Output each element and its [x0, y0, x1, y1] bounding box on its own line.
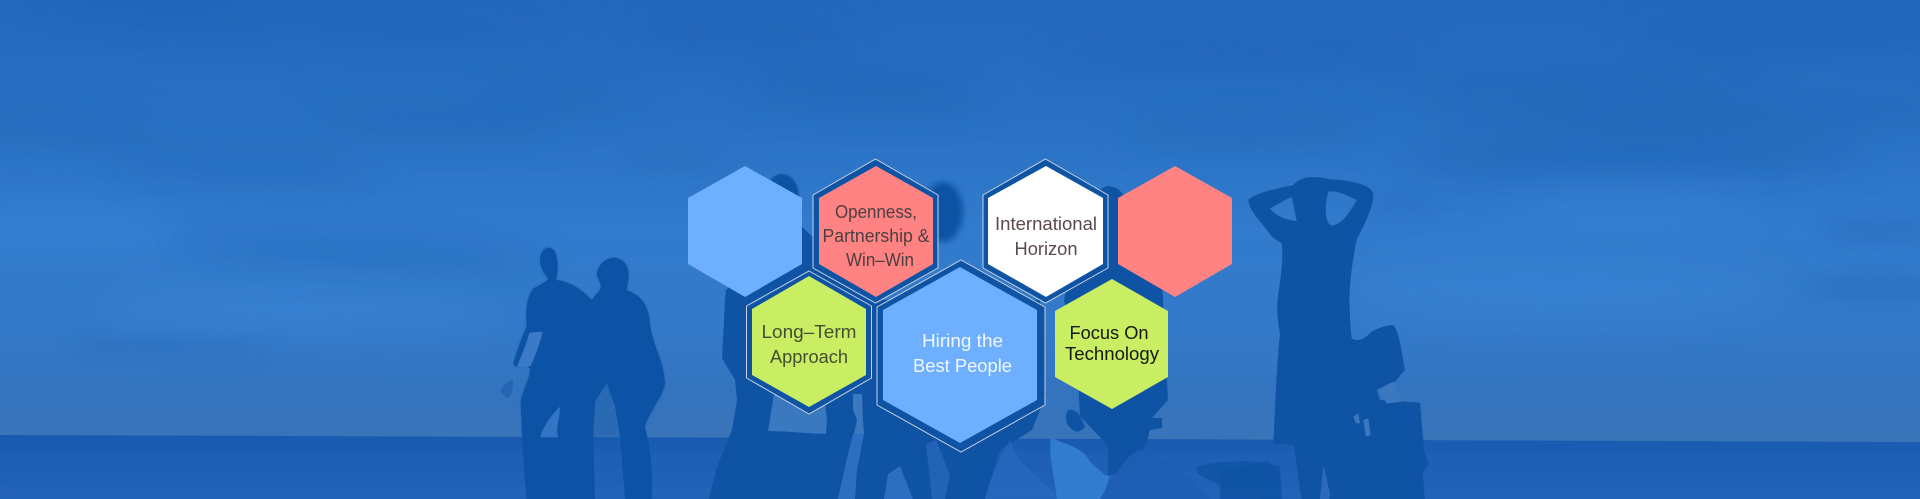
hexagon: Hiring the Best People: Best People	[913, 355, 1012, 376]
person behind the focus hexagon	[1064, 186, 1168, 476]
hexagon: International Horizon	[983, 159, 1108, 303]
rock	[1220, 460, 1280, 499]
hexagon: Long-Term Approach	[746, 271, 872, 414]
central bodies	[709, 225, 1046, 499]
silhouette: person with raised arms on the right	[1220, 177, 1428, 499]
silhouette: couple on the left	[501, 248, 665, 499]
hexagon: Long-Term Approach: Long–Term	[762, 321, 856, 342]
hexagon: International Horizon: Horizon	[1014, 238, 1078, 259]
hexagon: Openness, Partnership & Win-Win: Openness,	[835, 201, 917, 222]
crouching figure	[1066, 410, 1085, 432]
hexagon: Openness, Partnership & Win-Win	[813, 159, 938, 303]
hexagon: Focus On Technology: Focus On	[1070, 322, 1148, 343]
hexagon: Openness, Partnership & Win-Win: Partnership &	[822, 225, 930, 246]
light sky gap and rocks in the foreground	[768, 375, 1282, 499]
hexagon: Focus On Technology: Technology	[1065, 343, 1160, 364]
background: sea	[0, 435, 1920, 499]
camera gear	[1146, 392, 1162, 445]
hexagon: plain red	[1118, 166, 1232, 297]
hexagon: Hiring the Best People: Hiring the	[922, 330, 1003, 351]
hexagon: International Horizon: International	[995, 213, 1097, 234]
blurred head behind the red hexagon	[923, 182, 963, 242]
hexagon: Focus On Technology	[1055, 279, 1168, 409]
hexagon: Long-Term Approach: Approach	[770, 346, 848, 367]
hexagon: Hiring the Best People	[877, 260, 1045, 452]
head behind the blue hexagon	[765, 174, 799, 218]
hexagon: plain blue	[688, 166, 802, 297]
hexagon: Openness, Partnership & Win-Win: Win–Win	[846, 249, 914, 270]
silhouette: group behind the hexagons	[709, 174, 1168, 499]
